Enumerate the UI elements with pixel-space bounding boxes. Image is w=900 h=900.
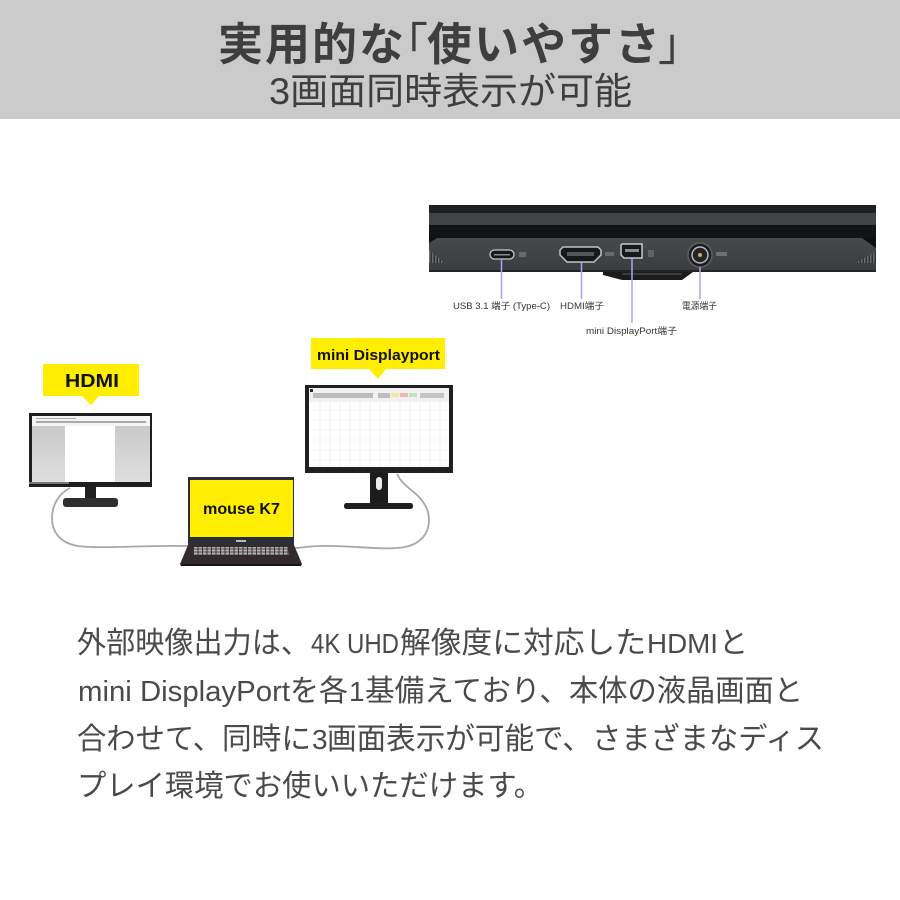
title: 「 [383,19,428,70]
line 3: 画面表示が可能で、 [327,723,592,756]
power jack [688,243,727,267]
callout: mini Displayport: mini Displayport [317,347,440,364]
title [218,19,703,70]
callout: HDMI [43,364,139,405]
callout: mini Displayport [311,338,445,379]
port labels [453,300,717,336]
title: 実用的な [218,19,404,70]
port labels: 電源端子 [682,300,717,311]
line 2: mini DisplayPort [78,676,290,708]
port labels: HDMI端子 [560,300,604,311]
left monitor [29,413,152,507]
header band [0,0,900,119]
line 1: 外部映像出力は、 [77,627,310,660]
line 3: 同時に [222,723,311,756]
right monitor [305,385,453,509]
line 4: プレイ環境でお使いいただけます。 [77,770,543,803]
line 3 [77,723,824,756]
title: 使いやすさ [427,19,660,70]
subtitle: 3画面同時表示が可能 [269,71,632,112]
laptop: mouse K7 [203,501,280,518]
port labels: USB 3.1 端子 (Type-C) [453,300,550,311]
line 2: 基備えており、 [365,675,569,708]
line 1: 4K UHD [311,628,399,659]
spreadsheet toolbar [310,389,444,398]
usb-c port [490,250,526,259]
line 1: と [719,627,748,660]
cable: HDMI monitor to laptop [52,488,188,547]
hdmi port [560,247,614,262]
body paragraph [77,627,824,803]
line 2 [78,675,803,708]
line 3: 合わせて、 [77,723,222,756]
laptop [180,477,302,566]
mini displayport [621,244,654,258]
port photo: laptop rear panel [429,205,876,336]
line 1: HDMI [647,628,718,659]
line 1: 解像度に対応した [400,627,646,660]
callout: HDMI: HDMI [65,371,119,391]
line 2: 1 [349,676,365,707]
port labels: mini DisplayPort端子 [586,325,677,336]
line 2: を各 [290,675,348,708]
line 3: 3 [312,724,328,755]
callout lines [502,258,700,323]
vents [429,250,876,263]
line 1 [77,627,748,660]
line 2: 本体の液晶画面と [569,675,803,708]
cable: DisplayPort monitor to laptop [295,474,429,548]
title: 」 [658,19,703,70]
line 3: さまざまなディス [592,723,824,756]
spreadsheet grid [310,402,448,467]
